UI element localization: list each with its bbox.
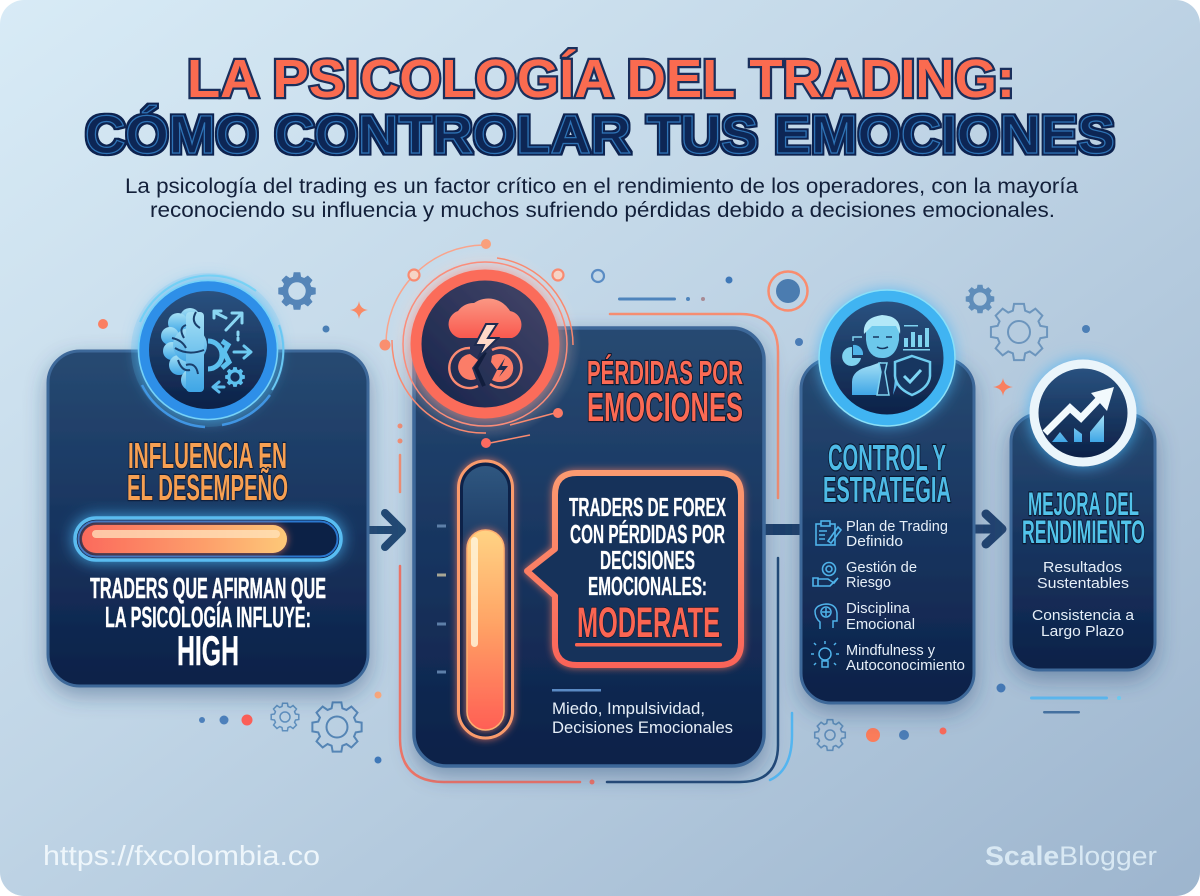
stat text: TRADERS QUE AFIRMAN QUE	[90, 573, 326, 605]
item: disciplina emocional	[846, 601, 915, 633]
heading	[127, 435, 288, 508]
panel: mejora del rendimiento	[1011, 364, 1155, 670]
outcomes text	[1032, 559, 1135, 640]
item: mindfulness: Mindfulness y	[846, 643, 936, 659]
item: plan de trading	[846, 519, 948, 550]
item: disciplina emocional: Disciplina	[846, 601, 911, 617]
heading: EL DESEMPEÑO	[127, 466, 288, 508]
item: disciplina emocional: Emocional	[846, 617, 915, 633]
footer url: https://fxcolombia.co	[43, 840, 320, 871]
heading: INFLUENCIA EN	[128, 435, 287, 476]
panel: influencia en el desempeño	[48, 273, 368, 686]
callout: moderate: DECISIONES	[600, 545, 695, 575]
heading: EMOCIONES	[587, 384, 743, 430]
decorative icons centre top	[592, 270, 808, 310]
outcomes text: Largo Plazo	[1041, 623, 1124, 640]
icon: trader with shield	[819, 290, 955, 426]
causes text: Decisiones Emocionales	[552, 719, 733, 737]
arrow: influence to losses	[366, 513, 402, 547]
accent line	[552, 689, 601, 692]
outcomes text: Consistencia a	[1032, 607, 1135, 624]
item: gestión de riesgo: Gestión de	[846, 560, 917, 576]
panel: control y estrategia	[801, 290, 974, 703]
item: plan de trading: Definido	[846, 534, 903, 550]
stat text	[90, 573, 326, 674]
arrow: control to improvement	[972, 514, 1002, 544]
causes text	[552, 700, 733, 737]
icon: clipboard	[816, 521, 841, 545]
outcomes text: Sustentables	[1037, 575, 1129, 592]
heading: CONTROL Y	[828, 437, 946, 478]
title: CÓMO CONTROLAR TUS EMOCIONES	[85, 105, 1115, 165]
callout: moderate: CON PÉRDIDAS POR	[570, 519, 725, 549]
thermometer gauge	[437, 461, 512, 738]
stat text: LA PSICOLOGÍA INFLUYE:	[105, 600, 311, 634]
arrow: losses to control	[763, 524, 805, 535]
heading	[1022, 486, 1145, 550]
title: LA PSICOLOGÍA DEL TRADING:	[187, 49, 1015, 109]
subtitle	[125, 175, 1078, 222]
callout: moderate: TRADERS DE FOREX	[569, 492, 726, 522]
icon: light bulb	[811, 641, 839, 667]
heading: PÉRDIDAS POR	[587, 354, 743, 391]
item: mindfulness	[846, 643, 965, 674]
icon: head with mind	[815, 604, 837, 629]
frame lines around centre panel	[398, 314, 792, 784]
heading: ESTRATEGIA	[823, 469, 951, 510]
progress bar	[75, 518, 341, 560]
footer brand: ScaleBlogger	[985, 841, 1157, 871]
icon: storm cloud and broken coins	[380, 239, 581, 448]
stat text: HIGH	[177, 627, 239, 674]
causes text: Miedo, Impulsividad,	[552, 700, 705, 718]
decorative icons left	[98, 272, 382, 764]
item: gestión de riesgo: Riesgo	[846, 575, 891, 591]
icon: growth arrow	[1034, 364, 1132, 462]
item: gestión de riesgo	[846, 560, 917, 591]
heading	[587, 354, 743, 430]
subtitle: reconociendo su influencia y muchos sufriendo pérdidas debido a decisiones emocionales.	[150, 199, 1055, 222]
heading	[823, 437, 951, 510]
title	[85, 49, 1115, 165]
item: plan de trading: Plan de Trading	[846, 519, 948, 535]
panel: pérdidas por emociones	[380, 239, 764, 766]
icon: hand with coin	[813, 562, 838, 586]
icon: brain and gears	[131, 273, 285, 427]
callout: moderate	[527, 473, 741, 665]
decorative icons right	[795, 285, 1121, 750]
subtitle: La psicología del trading es un factor crítico en el rendimiento de los operadores, con la mayoría	[125, 175, 1078, 198]
callout: moderate: EMOCIONALES:	[588, 571, 707, 601]
outcomes text: Resultados	[1043, 559, 1122, 576]
callout: moderate: MODERATE	[577, 599, 720, 647]
item: mindfulness: Autoconocimiento	[846, 658, 965, 674]
